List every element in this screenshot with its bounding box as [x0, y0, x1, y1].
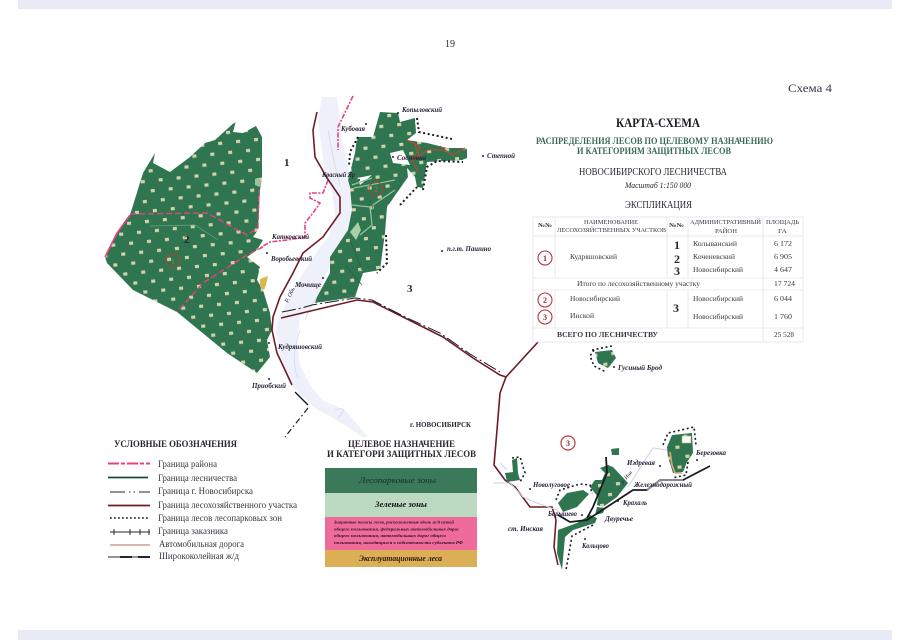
west forest massif	[105, 121, 272, 373]
row: Novosibirsky and Inskoy: Новосибирский	[693, 313, 743, 321]
west forest settlement patch	[260, 276, 268, 290]
subtitle: И КАТЕГОРИЯМ ЗАЩИТНЫХ ЛЕСОВ	[577, 147, 732, 157]
district boundary item	[108, 459, 217, 469]
southeast forest park boundary dots	[512, 427, 696, 570]
row: Novosibirsky and Inskoy: 3	[543, 313, 547, 322]
category: production forests: Эксплуатационные леса	[359, 554, 442, 563]
categories heading: И КАТЕГОРИ ЗАЩИТНЫХ ЛЕСОВ	[327, 450, 477, 460]
table header: ПЛОЩАДЬ	[766, 220, 800, 226]
settlement labels: г. НОВОСИБИРСК	[410, 421, 472, 429]
categories heading: ЦЕЛЕВОЕ НАЗНАЧЕНИЕ	[348, 440, 455, 450]
bottom decorative band	[18, 630, 892, 640]
row: Novosibirsky and Inskoy: Новосибирский	[570, 295, 620, 303]
main title: КАРТА-СХЕМА	[616, 115, 701, 130]
west forest clearing	[255, 178, 261, 187]
categories heading	[327, 440, 477, 460]
forest park boundary dots	[349, 118, 463, 273]
settlement labels: Кубовая	[340, 125, 365, 133]
table header: АДМИНИСТРАТИВНЫЙ	[690, 218, 762, 226]
Gusiny Brod forest	[590, 346, 616, 372]
section boundary item: Граница лесохозяйственного участка	[158, 500, 297, 510]
central forest clearings	[345, 150, 410, 285]
settlement labels: Сосновка	[397, 154, 426, 162]
section numbers	[184, 157, 413, 295]
settlement labels: Кольцово	[581, 542, 609, 550]
circled section markers on map: 2	[374, 185, 378, 194]
management section boundary road	[272, 112, 558, 565]
row: Novosibirsky and Inskoy: 6 044	[774, 295, 793, 303]
row: grand total	[557, 331, 795, 339]
settlement labels: Красный Яр	[321, 171, 355, 179]
row: Novosibirsky and Inskoy: 1 760	[774, 313, 793, 321]
section numbers: 3	[407, 283, 413, 295]
row: Kudryashovsky: Кудряшовский	[570, 253, 617, 261]
row: section total: Итого по лесохозяйственному участку	[577, 280, 701, 288]
circled section markers on map: 1	[171, 257, 175, 266]
category: protective strips: общего пользования, федеральных автомобильных дорог	[334, 526, 460, 532]
southeast rivers	[493, 448, 667, 520]
table header: ГА	[778, 229, 788, 235]
map	[105, 96, 726, 570]
road item: Автомобильная дорога	[159, 539, 244, 549]
settlement labels: Приобский	[251, 382, 286, 390]
city boundary item: Граница г. Новосибирска	[158, 486, 253, 496]
category: green zones	[325, 493, 477, 517]
legend heading: УСЛОВНЫЕ ОБОЗНАЧЕНИЯ	[114, 440, 237, 450]
table header: НАИМЕНОВАНИЕ	[584, 220, 638, 226]
category: forest park zones	[325, 468, 477, 493]
row: Kudryashovsky: Колыванский	[693, 240, 737, 248]
category: protective strips: Защитные полосы лесов, расположенные вдоль ж/д путей	[333, 520, 455, 524]
table grid	[533, 217, 803, 342]
subtitle	[536, 137, 773, 157]
top decorative band	[18, 0, 892, 9]
settlement labels: Крахаль	[622, 499, 647, 507]
circled section markers on map: 3	[566, 439, 570, 448]
settlement labels: Мочище	[294, 281, 321, 289]
table header: ЛЕСОХОЗЯЙСТВЕННЫХ УЧАСТКОВ	[557, 226, 666, 234]
scheme label: Схема 4	[788, 81, 832, 95]
settlement labels: р. Иня	[619, 470, 634, 486]
settlement labels: Копыловский	[401, 106, 442, 114]
forestry name: НОВОСИБИРСКОГО ЛЕСНИЧЕСТВА	[579, 167, 728, 178]
settlement labels: Березовка	[695, 449, 726, 457]
row: grand total: 25 528	[774, 331, 795, 339]
settlement labels: Степной	[487, 152, 515, 160]
row: Kudryashovsky: 1	[543, 254, 547, 263]
railway item: Ширококолейная ж/д	[159, 551, 239, 561]
row: Novosibirsky and Inskoy: Инской	[570, 312, 594, 320]
reserve boundary item	[110, 526, 228, 536]
row: Kudryashovsky: 2	[674, 252, 680, 266]
settlement labels: Катковский	[271, 233, 309, 241]
title block	[536, 115, 773, 211]
row: Novosibirsky and Inskoy: Новосибирский	[693, 295, 743, 303]
table header: №№	[538, 223, 552, 229]
southeast forests	[505, 433, 693, 570]
row: Novosibirsky and Inskoy	[538, 293, 793, 324]
central forest massif	[315, 112, 467, 303]
railway	[558, 457, 710, 522]
west forest internal boundaries	[105, 190, 263, 312]
settlement labels	[251, 106, 726, 550]
settlement labels: Железнодорожный	[633, 481, 692, 489]
row: Novosibirsky and Inskoy: 3	[673, 301, 679, 315]
subtitle: РАСПРЕДЕЛЕНИЯ ЛЕСОВ ПО ЦЕЛЕВОМУ НАЗНАЧЕНИЮ	[536, 137, 773, 147]
settlement labels: ст. Инская	[508, 525, 543, 533]
legend: forest categories	[325, 440, 477, 567]
table header: РАЙОН	[715, 227, 738, 235]
forest park boundary item: Граница лесов лесопарковых зон	[158, 513, 282, 523]
section numbers: 1	[284, 157, 290, 169]
settlement labels: Издревая	[626, 459, 655, 467]
legend: symbols	[108, 440, 297, 561]
settlement labels: Двуречье	[604, 515, 633, 523]
section numbers: 2	[184, 234, 190, 246]
Novosibirsk city boundary	[282, 298, 500, 437]
category: production forests	[325, 550, 477, 567]
row: Kudryashovsky: 3	[674, 264, 680, 278]
settlement labels: Кудряшовский	[277, 343, 322, 351]
railway item	[108, 551, 239, 561]
category: protective strips: пользования, находящихся в собственности субъектов РФ	[334, 540, 464, 545]
row: Kudryashovsky: 6 172	[774, 240, 793, 248]
page number: 19	[445, 39, 455, 50]
row: Kudryashovsky: 6 905	[774, 253, 793, 261]
explication table	[533, 217, 803, 342]
reserve boundary item: Граница заказника	[158, 526, 228, 536]
row: Kudryashovsky	[538, 238, 793, 278]
table header	[538, 218, 800, 235]
category: green zones: Зеленые зоны	[374, 500, 427, 509]
road item	[110, 539, 244, 549]
scale: Масштаб 1:150 000	[624, 181, 691, 190]
row: Kudryashovsky: 1	[674, 238, 680, 252]
row: Novosibirsky and Inskoy: 2	[543, 296, 547, 305]
district boundary	[260, 96, 353, 248]
forestry boundary item: Граница лесничества	[158, 473, 237, 483]
settlement labels: Р. Обь	[283, 286, 297, 305]
river Ob	[275, 97, 368, 437]
row: Kudryashovsky: 4 647	[774, 266, 793, 274]
district boundary item: Граница района	[158, 459, 217, 469]
category: protective strips: общего пользования, автомобильных дорог общего	[334, 533, 446, 538]
category: protective strips	[325, 517, 477, 550]
settlement labels: п.г.т. Пашино	[447, 245, 491, 253]
row: section total: 17 724	[774, 280, 796, 288]
forestry boundary item	[108, 473, 237, 483]
row: Kudryashovsky: Коченевский	[693, 253, 735, 261]
settlement labels: Гусиный Брод	[617, 364, 663, 372]
circled section markers on map	[166, 182, 575, 450]
red tracks on east arm	[407, 140, 465, 172]
settlement labels: Новолуговое	[532, 481, 570, 489]
row: section total	[577, 280, 796, 288]
row: Kudryashovsky: Новосибирский	[693, 266, 743, 274]
category: forest park zones: Лесопарковые зоны	[358, 476, 437, 485]
settlement labels: Воробьевский	[270, 255, 312, 263]
settlement labels: Барышево	[547, 510, 577, 518]
row: grand total: ВСЕГО ПО ЛЕСНИЧЕСТВУ	[557, 331, 658, 339]
explication heading: ЭКСПЛИКАЦИЯ	[625, 200, 692, 211]
table header: №№	[669, 223, 684, 229]
